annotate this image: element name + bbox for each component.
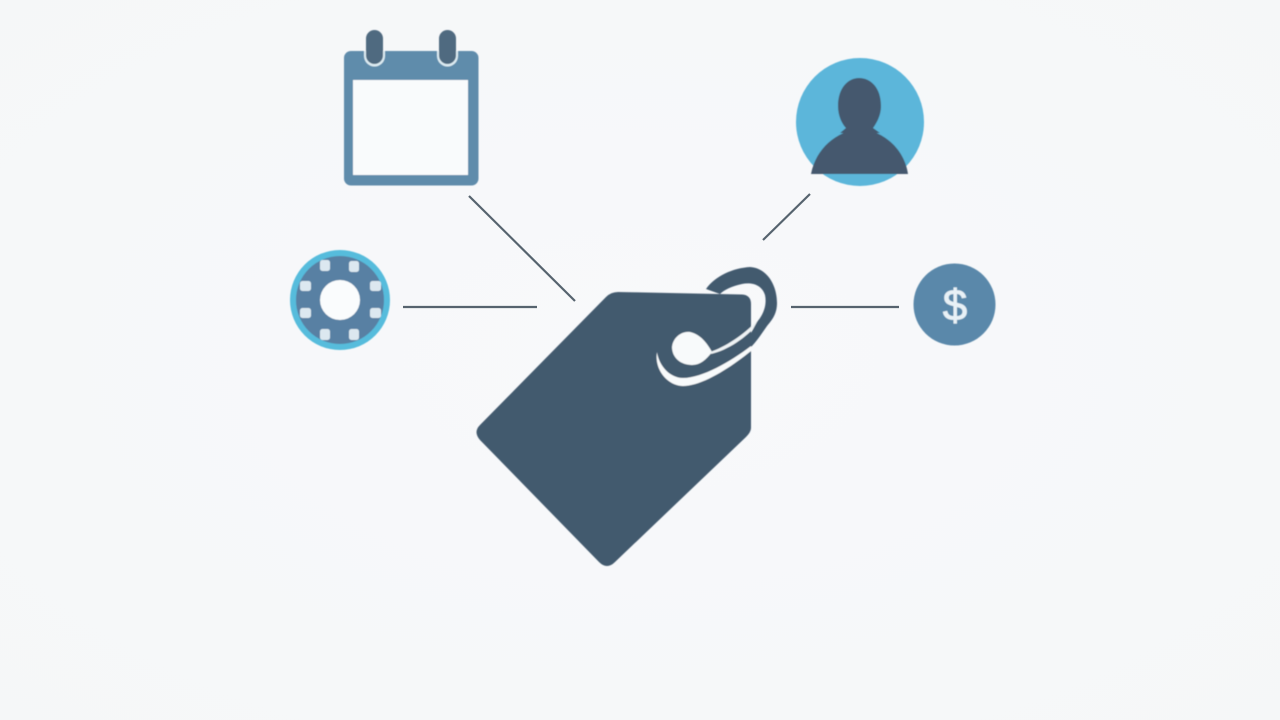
icon: gear bbox=[290, 250, 390, 350]
tag hole bbox=[672, 332, 712, 365]
icon: calendar bbox=[344, 30, 478, 186]
connector: calendar to tag bbox=[469, 196, 575, 301]
ring highlight upper bbox=[710, 321, 758, 354]
price tag bbox=[476, 267, 777, 566]
connector: person to tag bbox=[763, 194, 810, 240]
ring highlight bbox=[657, 346, 751, 386]
ring bbox=[706, 267, 777, 347]
icon: dollar coin bbox=[914, 264, 996, 346]
icon: dollar coin: $ bbox=[943, 281, 967, 330]
tag body bbox=[476, 292, 751, 566]
icon: person in circle bbox=[796, 58, 924, 186]
connector: dollar to tag bbox=[791, 306, 899, 308]
connector: gear to tag bbox=[403, 306, 537, 308]
